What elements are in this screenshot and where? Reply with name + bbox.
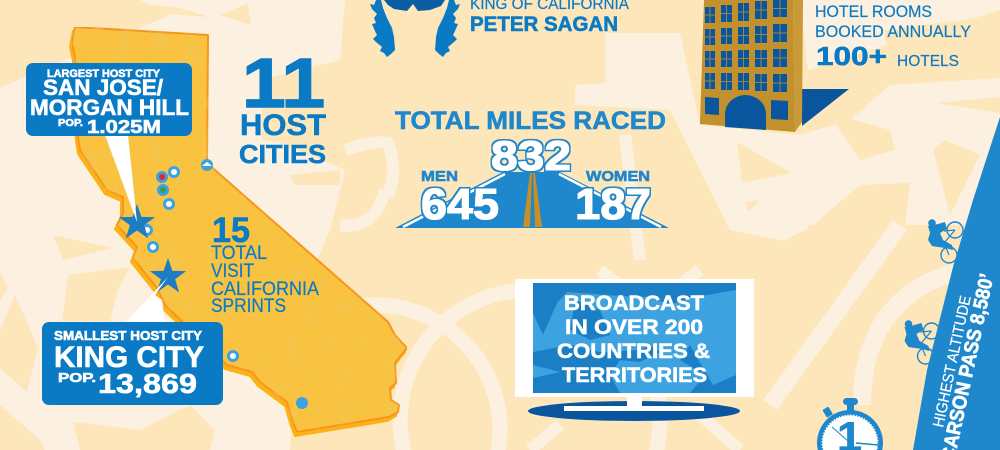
map marker: mountain — [201, 159, 213, 171]
callout: largest host city: LARGEST HOST CITY — [47, 68, 161, 80]
star: King City — [150, 258, 186, 292]
stat: miles numbers — [421, 132, 651, 229]
callout: smallest host city: 13,869 — [98, 368, 197, 399]
stat: miles numbers: 645 — [421, 180, 499, 229]
stat: 15 sprints: CALIFORNIA — [211, 279, 319, 300]
text: king of California — [470, 0, 629, 36]
callout: largest host city: 1.025M — [87, 117, 161, 137]
text: broadcast: TERRITORIES — [562, 364, 707, 387]
stat: 15 sprints: VISIT — [211, 261, 254, 282]
text: broadcast: BROADCAST — [564, 292, 704, 315]
icon: television — [515, 279, 754, 421]
callout: smallest host city — [42, 322, 223, 405]
icon: stopwatch — [817, 398, 883, 450]
stat: miles numbers: WOMEN — [586, 168, 650, 185]
callout: smallest host city: POP. — [58, 370, 96, 385]
text: hotel stats: HOTELS — [897, 53, 959, 70]
callout: smallest host city: SMALLEST HOST CITY — [54, 329, 203, 343]
stat: miles numbers: 832 — [491, 132, 571, 179]
icon: cyclist upper — [928, 219, 963, 263]
map markers: cities — [142, 168, 306, 408]
stat: 11 host cities: HOST — [240, 109, 326, 142]
star: San Jose — [119, 204, 155, 238]
stat: miles numbers: 187 — [575, 180, 651, 229]
text: hotel stats — [815, 3, 971, 71]
stat: 15 sprints: TOTAL — [211, 243, 267, 264]
callout: largest host city: MORGAN HILL — [30, 95, 189, 120]
stat: 11 host cities — [239, 44, 326, 169]
text: highest altitude: HIGHEST ALTITUDE — [930, 294, 975, 429]
callout: smallest host city: KING CITY — [54, 341, 204, 374]
text: broadcast: COUNTRIES & — [557, 340, 710, 363]
stat: 15 sprints: 15 — [212, 211, 250, 250]
icon: hotel building — [700, 0, 849, 132]
California map — [70, 27, 407, 436]
stat: 15 sprints: SPRINTS — [211, 296, 286, 317]
callout: largest host city: SAN JOSE/ — [43, 75, 163, 100]
text: hotel stats: HOTEL ROOMS — [815, 3, 932, 21]
text: king of California: PETER SAGAN — [470, 13, 618, 36]
text: broadcast: IN OVER 200 — [565, 316, 703, 339]
text: hotel stats: BOOKED ANNUALLY — [815, 23, 971, 41]
pointer: largest city — [105, 135, 137, 222]
icon: cyclist lower — [904, 320, 940, 364]
heading: total miles raced: TOTAL MILES RACED — [395, 107, 666, 135]
text: hotel stats: 100+ — [816, 41, 887, 71]
callout: largest host city — [26, 63, 192, 137]
panel: altitude slope — [913, 117, 1000, 450]
stat: 15 sprints — [211, 211, 319, 317]
stat: 11 host cities: CITIES — [239, 139, 326, 169]
text: broadcast — [557, 292, 710, 387]
stat: 11 host cities: 11 — [242, 44, 325, 122]
stat: miles numbers: MEN — [421, 168, 458, 185]
pointer: smallest city — [125, 277, 168, 323]
callout: largest host city: POP. — [58, 118, 83, 129]
road graphic — [395, 172, 669, 228]
icon: Peter Sagan hair and sunglasses — [370, 0, 460, 57]
